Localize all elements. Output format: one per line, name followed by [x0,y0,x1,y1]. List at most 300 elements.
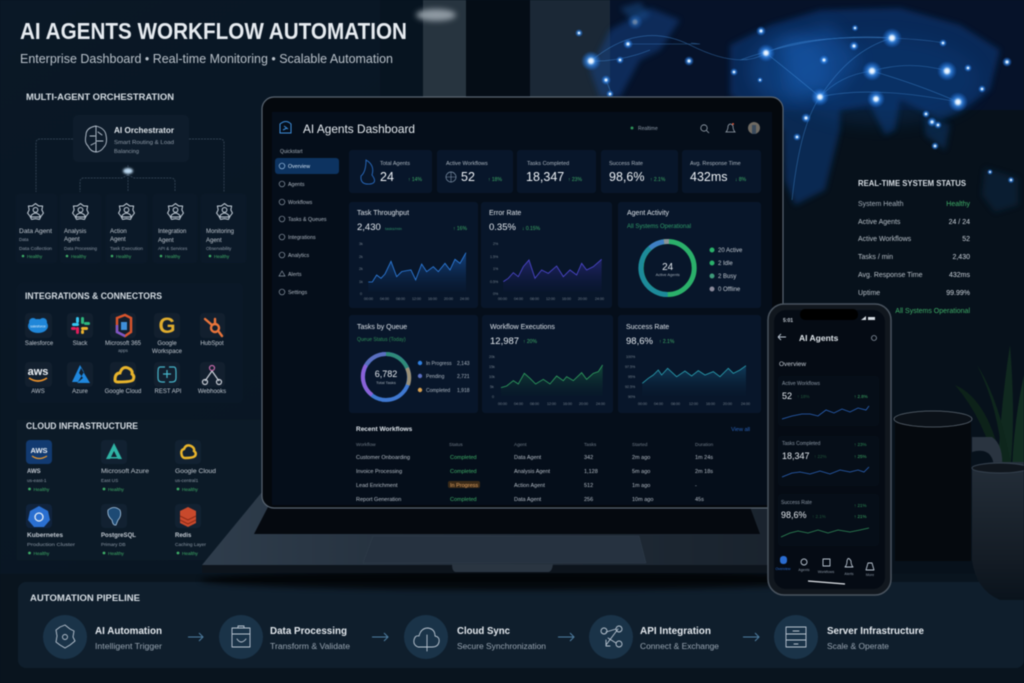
chart: agent activity: All Systems Operational [627,224,691,230]
icon: rest api [158,367,176,382]
chart: tasks by queue: Completed [426,388,450,394]
arrow [372,633,388,641]
chart: workflow executions: 16:00 [563,402,572,406]
chart: task throughput: 00:00 [364,297,373,301]
chart: task throughput: 16:00 [428,297,437,301]
phone card: tasks completed: ↑ 25% [854,454,867,459]
chart: agent activity: 24 [662,262,674,273]
panel: real-time system status: Uptime [858,290,880,297]
phone nav: Alerts [844,572,854,576]
card: analysis agent: Agent [64,237,80,243]
KPI: tasks completed [517,150,596,193]
table: recent workflows: 10m ago [632,497,653,503]
step: cloud sync: Cloud Sync [457,626,510,637]
item: Kubernetes: Healthy [34,551,50,556]
table: recent workflows: 256 [584,497,593,503]
chart: task throughput: 12:00 [412,297,421,301]
integration labels: Webhooks [198,389,226,395]
icon: google: G [158,313,176,338]
laptop lid [262,97,783,508]
card: AI orchestrator: Balancing [114,149,139,155]
KPI: tasks completed: ↑ 23% [568,177,582,183]
item: AWS: AWS [30,446,48,455]
item: PostgreSQL: Primary DB [101,542,126,548]
chart: workflow executions: 04:00 [514,402,523,406]
panel: real-time system status: 52 [962,236,970,243]
chart: tasks by queue: Tasks by Queue [357,324,407,331]
panel: real-time system status: 432ms [949,272,970,279]
chart: tasks by queue: 2,143 [457,361,470,367]
chart: success rate [618,315,761,413]
phone nav: Overview [776,567,791,571]
table: recent workflows: Completed [450,455,477,461]
icon: salesforce [28,318,48,333]
arrow [743,633,759,641]
chart: tasks by queue: Pending [426,374,445,380]
chart: tasks by queue: 2,721 [457,374,470,380]
card: data agent: Data Agent [19,229,52,235]
table: recent workflows [356,426,750,503]
icon: microsoft 365 [117,315,131,336]
card: action agent: Agent [110,237,126,243]
chart: task throughput: 2k [359,267,363,271]
chart: task throughput: 20:00 [444,297,453,301]
heading: multi-agent orchestration: MULTI-AGENT ORCHESTRATION [26,92,174,102]
chart: task throughput: 08:00 [396,297,405,301]
chart: success rate: 90% [628,395,636,399]
card: monitoring agent: Agent [206,238,222,244]
chart: success rate: 98,6% [626,336,653,347]
chart: task throughput: 24:00 [460,297,469,301]
chart: workflow executions: 20k [489,355,495,359]
integration labels: Azure [72,389,88,395]
item: Microsoft Azure: Microsoft Azure [101,469,150,475]
chart: error rate: 24:00 [595,297,604,301]
chart: workflow executions: 0 [492,395,494,399]
item: PostgreSQL [101,504,136,556]
chart: success rate: 97.5% [625,365,636,369]
chart: workflow executions: 12,987 [490,336,519,347]
chart: success rate: 04:00 [654,402,663,406]
chart: error rate: 1.5% [490,255,499,259]
chart: success rate: Success Rate [626,324,669,331]
icon: webhooks [202,366,222,384]
step: cloud sync: Secure Synchronization [457,642,546,651]
phone card: active workflows [778,376,879,426]
step: data processing: Transform & Validate [270,642,351,651]
KPI: response time [682,150,761,193]
KPI: tasks completed: 18,347 [526,170,564,184]
card: integration agent [153,194,197,263]
card: monitoring agent: Observability [206,246,232,251]
KPI: active workflows: Active Workflows [446,161,488,167]
integration labels [25,341,226,395]
chart: error rate: 0.5% [490,280,499,284]
panel: integrations and connectors [17,283,243,403]
icon: azure [72,365,90,383]
card: analysis agent [60,194,101,263]
card: integration agent: API & Services [158,246,188,251]
KPI: active workflows: 52 [461,170,475,184]
KPI: total agents [349,150,432,193]
integration labels: Workspace [152,349,183,355]
chart: error rate: 0% [493,292,499,296]
panel: real-time system status [858,178,970,315]
chart: workflow executions: 15k [489,365,495,369]
table: recent workflows: Tasks [584,442,597,448]
table: recent workflows: Workflow [356,442,376,448]
step: server infrastructure: Scale & Operate [827,642,890,651]
chart: error rate: 00:00 [498,297,507,301]
phone card: tasks completed [778,436,879,486]
item: PostgreSQL: Healthy [108,551,125,556]
phone card: tasks completed: Tasks Completed [782,441,821,447]
integration labels: apps [118,348,129,353]
item: Kubernetes [26,504,75,556]
phone card: tasks completed: ↑ 23% [854,442,867,447]
KPI: total agents: ↑ 14% [408,177,422,183]
chart: error rate: 1% [493,267,499,271]
panel: multi-agent orchestration [16,92,246,263]
item: Redis: Healthy [182,551,199,556]
table: recent workflows: Analysis Agent [514,469,551,475]
donut: agents [641,241,694,295]
table: recent workflows: Data Agent [514,497,542,503]
card: analysis agent: Analysis [64,229,86,235]
chart: success rate: 20:00 [723,402,732,406]
icon: hubspot [205,319,222,336]
card: monitoring agent: Monitoring [206,229,234,235]
chart: error rate: 20:00 [578,297,587,301]
chart: error rate: ↓ 0.15% [522,226,541,232]
panel: real-time system status: Healthy [946,201,970,208]
chart: workflow executions: 12:00 [547,402,556,406]
table: recent workflows: Invoice Processing [356,469,402,475]
chart: agent activity: Agent Activity [627,210,670,217]
card: action agent: Healthy [116,254,132,259]
dashboard header: Realtime [638,126,658,132]
step: server infrastructure: Server Infrastructure [827,626,924,637]
phone nav: Workflows [818,570,834,574]
KPI: success rate: ↑ 2.1% [650,177,666,183]
dashboard header [280,122,760,136]
card: action agent: Action [110,229,127,235]
panel: cloud infrastructure [17,420,262,560]
panel: automation pipeline [18,582,1024,668]
KPI cards [349,150,761,193]
step: server infrastructure [774,615,924,659]
integration labels: Microsoft 365 [105,341,142,347]
integration labels: AWS [31,389,45,395]
table: recent workflows: 1m ago [632,483,650,489]
KPI: tasks completed: Tasks Completed [527,161,569,167]
dashboard sidebar: Integrations [288,235,316,241]
chart: success rate: 92.5% [625,385,636,389]
step: API integration: API Integration [640,626,711,637]
dashboard sidebar: Analytics [288,253,310,259]
world map network [575,0,1024,212]
table: recent workflows: Completed [450,469,477,475]
notch [800,309,858,320]
chart: success rate: 24:00 [741,402,750,406]
chart: success rate: ↑ 2.1% [659,339,675,345]
chart: tasks by queue: In Progress [426,361,452,367]
table: recent workflows: 2m ago [632,455,650,461]
item: Redis [175,504,206,556]
step: data processing [219,615,351,659]
table: recent workflows: Action Agent [514,483,545,489]
card: action agent [106,194,147,263]
table: recent workflows: Completed [450,497,477,503]
chart: agent activity: 2 Idle [718,261,733,267]
phone nav: Agents [798,568,810,572]
card: monitoring agent: Healthy [214,254,230,259]
item: PostgreSQL: PostgreSQL [101,533,136,539]
phone header [778,333,876,368]
table: recent workflows: 5m ago [632,469,650,475]
item: AWS: us-east-1 [27,478,47,483]
table: recent workflows: Customer Onboarding [356,455,410,461]
chart: error rate: 2% [493,242,499,246]
panel: real-time system status: All Systems Operational [895,308,970,315]
KPI: total agents: Total Agents [380,161,410,167]
card: AI orchestrator: AI Orchestrator [114,126,174,135]
phone card: success rate: 98,6% [781,510,807,520]
phone header: Overview [779,361,806,368]
phone card: success rate: ↑ 2.1% [812,514,826,519]
item: Google Cloud: Google Cloud [175,469,216,475]
item: Redis: Caching Layer [175,542,206,548]
KPI: response time: ↓ 8% [735,177,747,183]
chart: error rate [481,202,612,308]
phone nav: More [866,573,874,577]
chart: error rate: 16:00 [562,297,571,301]
dashboard sidebar: Tasks & Queues [288,217,327,223]
dashboard sidebar: Agents [288,182,305,188]
dashboard sidebar [275,149,339,296]
step: API integration [589,615,720,659]
phone [768,304,891,595]
chart: task throughput: 3k [359,242,363,246]
chart: task throughput: 2,430 [357,222,381,233]
trackpad [363,536,646,563]
chart: error rate: 12:00 [546,297,555,301]
chart: task throughput [349,202,478,308]
table: recent workflows: View all [731,427,750,433]
integration labels: Slack [73,341,88,347]
chart: tasks by queue [349,315,478,413]
table: recent workflows: In Progress [450,483,478,489]
phone card: active workflows: 52 [782,391,792,401]
panel: real-time system status: 2,430 [952,254,970,261]
table: recent workflows: Started [632,442,648,448]
subtitle: Enterprise Dashboard • Real-time Monitoring • Scalable Automation [20,51,393,66]
heading: integrations: INTEGRATIONS & CONNECTORS [25,291,162,301]
chart: task throughput: 0 [360,292,362,296]
item: Microsoft Azure: Healthy [108,487,125,492]
laptop base [202,492,845,573]
decor: mug and plant [894,345,1024,600]
card: analysis agent: Data Processing [64,246,98,251]
chart: task throughput: 1k [359,280,363,284]
chart: error rate: Error Rate [489,210,521,217]
item: Microsoft Azure [101,440,150,492]
card: AI orchestrator: Smart Routing & Load [114,140,174,146]
chart: workflow executions: 08:00 [530,402,539,406]
chart: workflow executions: 5k [490,385,494,389]
card: integration agent: Integration [158,229,186,235]
card: integration agent: Healthy [165,254,181,259]
phone header: AI Agents [799,333,839,343]
card: integration agent: Agent [158,238,174,244]
phone card: success rate: ↑ 21% [854,503,867,508]
chart: error rate: 04:00 [514,297,523,301]
chart: tasks by queue: 1,918 [457,388,470,394]
chart: tasks by queue: Total Tasks [376,380,396,385]
chart: success rate: 95% [628,375,636,379]
dashboard sidebar: Quickstart [280,149,303,155]
KPI: active workflows: ↑ 18% [488,177,502,183]
dashboard sidebar: Alerts [288,272,302,278]
chart: agent activity [618,202,761,308]
heading: status: REAL-TIME SYSTEM STATUS [858,178,966,188]
integration labels: Google [157,341,177,347]
chart: error rate: 0.35% [489,222,516,233]
table: recent workflows: Recent Workflows [356,426,413,433]
panel: real-time system status: System Health [858,201,904,208]
dashboard header: AI Agents Dashboard [303,122,415,136]
phone card: active workflows: Active Workflows [782,381,820,387]
table: recent workflows: - [695,483,697,489]
KPI: total agents: 24 [380,170,394,184]
panel: real-time system status: 24 / 24 [949,219,970,226]
KPI: response time: Avg. Response Time [690,161,741,167]
phone: 5:01 [783,318,793,324]
table: recent workflows: Duration [695,442,713,448]
table: recent workflows: Agent [514,442,527,448]
dashboard sidebar: Overview [288,164,310,170]
chart: success rate: 08:00 [671,402,680,406]
KPI: success rate: 98,6% [609,170,644,184]
chart: workflow executions: ↑ 20% [523,339,537,345]
table: recent workflows: Lead Enrichment [356,483,398,489]
KPI: success rate: Success Rate [609,161,643,167]
dashboard sidebar: Workflows [288,200,313,206]
phone card: success rate [778,494,879,546]
KPI: success rate [601,150,678,193]
arrow [558,633,574,641]
chart: task throughput: ↑ 16% [453,226,467,232]
integration labels: HubSpot [200,341,224,347]
phone card: active workflows: ↑ 2.8% [854,394,868,399]
integration labels: REST API [155,389,182,395]
step: AI automation [43,615,162,659]
chart: task throughput: 04:00 [380,297,389,301]
table: recent workflows: 342 [584,455,593,461]
step: AI automation: AI Automation [95,626,162,637]
table: recent workflows: 512 [584,483,593,489]
chart: tasks by queue: 6,782 [375,369,397,379]
item: Kubernetes: Production Cluster [27,542,75,548]
panel: real-time system status: 99.99% [946,290,970,297]
item: Google Cloud [175,440,216,492]
chart: tasks by queue: Queue Status (Today) [357,337,406,343]
phone card: tasks completed: 18,347 [782,451,810,461]
table: recent workflows: Data Agent [514,455,542,461]
chart: task throughput: Task Throughput [357,210,409,217]
item: AWS: Healthy [34,487,50,492]
card: data agent [16,194,57,263]
card: data agent: Data Collection [19,246,53,251]
chart: agent activity: 20 Active [718,248,743,254]
table: recent workflows: 1m 24s [695,455,713,461]
panel: real-time system status: Avg. Response Time [858,272,923,279]
chart: task throughput: 2k [359,255,363,259]
item: AWS [26,440,52,492]
card: data agent: Data [19,237,29,242]
chart: workflow executions: 10k [489,375,495,379]
chart: agent activity: 2 Busy [718,274,736,280]
laptop [200,97,845,590]
icon: salesforce: salesforce [30,324,46,328]
item: Google Cloud: us-central1 [175,478,199,483]
chart: workflow executions: 24:00 [596,402,605,406]
panel: real-time system status: Active Workflows [858,236,912,243]
item: AWS: AWS [27,469,41,475]
table: recent workflows: Status [449,442,463,448]
step: API integration: Connect & Exchange [640,642,720,651]
arrow [188,633,203,641]
card: data agent: Healthy [27,254,43,259]
phone card: active workflows: ↑ 18% [797,394,810,399]
phone card: tasks completed: ↑ 22% [814,454,827,459]
chart: task throughput: tasks/min [385,226,402,231]
integration labels: Google Cloud [105,389,141,395]
card: monitoring agent [201,194,246,263]
icon: aws: aws [28,366,48,378]
panel: real-time system status: Tasks / min [858,254,893,261]
dashboard sidebar: Settings [288,290,307,296]
phone card: success rate: ↑ 21% [854,514,867,519]
chart: workflow executions [482,315,613,413]
chart: success rate: 12:00 [689,402,698,406]
chart: error rate: 08:00 [530,297,539,301]
table: recent workflows: Report Generation [356,497,401,503]
chart: success rate: 16:00 [706,402,715,406]
chart: workflow executions: 20:00 [579,402,588,406]
chart: workflow executions: Workflow Executions [490,324,555,331]
chart: agent activity: 0 Offline [718,287,741,293]
table: recent workflows: 1,128 [584,469,598,475]
item: Microsoft Azure: East US [101,478,118,483]
card: action agent: Task Execution [110,246,144,251]
KPI: active workflows [437,150,513,193]
chart: success rate: 00:00 [638,402,647,406]
table: recent workflows: 2m 18s [695,469,713,475]
panel: real-time system status: Active Agents [858,219,901,226]
heading: cloud infrastructure: CLOUD INFRASTRUCTURE [26,421,138,431]
step: AI automation: Intelligent Trigger [95,642,162,651]
item: Google Cloud: Healthy [182,487,199,492]
chart: workflow executions: 00:00 [498,402,507,406]
KPI: response time: 432ms [690,170,728,184]
chart: agent activity: Active Agents [656,272,680,277]
item: Kubernetes: Kubernetes [27,533,64,539]
step: data processing: Data Processing [270,626,347,637]
title: AI AGENTS WORKFLOW AUTOMATION [20,18,407,44]
table: recent workflows: 45s [695,497,704,503]
heading: automation pipeline: AUTOMATION PIPELINE [30,593,140,604]
